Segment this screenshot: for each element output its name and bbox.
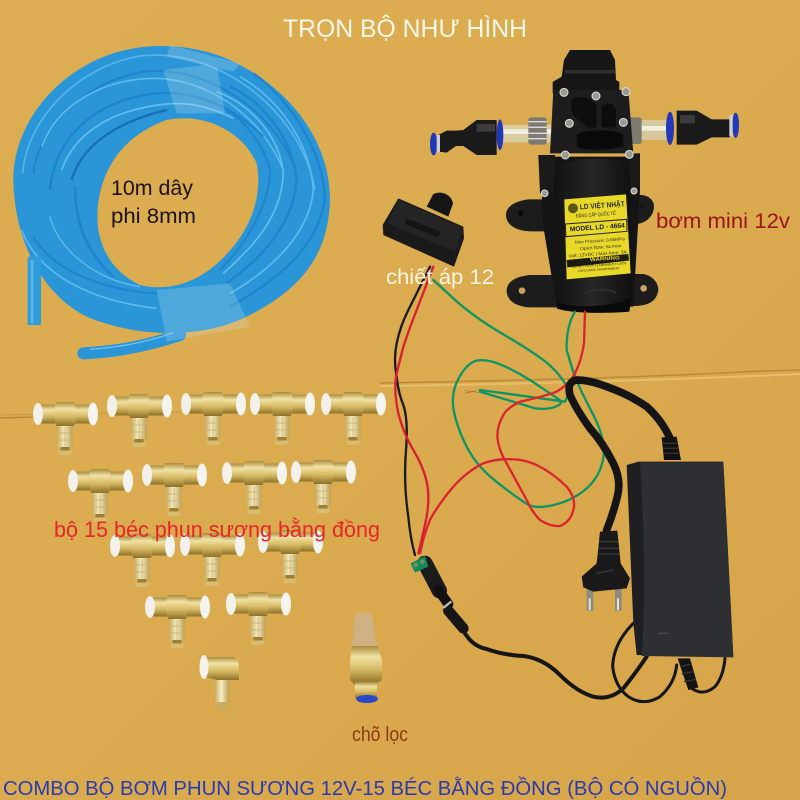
left hose connector bbox=[430, 117, 553, 155]
pump head bbox=[538, 50, 640, 197]
mains cord bbox=[569, 380, 670, 530]
bottom caption: COMBO BỘ BƠM PHUN SƯƠNG 12V-15 BÉC BẰNG ĐỒNG (BỘ CÓ NGUỒN) bbox=[3, 776, 727, 800]
inline filter bbox=[350, 612, 382, 703]
DC cords bbox=[465, 623, 725, 702]
pressure controller box bbox=[383, 193, 464, 267]
DC jack connector bbox=[411, 556, 463, 628]
yellow motor label: Max Pressure: 0.55MPa bbox=[575, 236, 626, 245]
yellow motor label: DO NOT PUMP FLAMMABLE FLUIDS bbox=[571, 261, 627, 269]
pump assembly bbox=[430, 50, 739, 313]
label: filter: chõ lọc bbox=[352, 724, 408, 746]
nozzle row 4 bbox=[145, 592, 291, 648]
brass mist nozzles (15) bbox=[33, 392, 386, 710]
yellow motor label: MODEL LD - 4664 bbox=[570, 222, 625, 233]
right hose connector bbox=[627, 111, 739, 145]
coil of blue hose bbox=[13, 45, 330, 353]
title: TRỌN BỘ NHƯ HÌNH bbox=[283, 14, 527, 43]
label: hose length: phi 8mm bbox=[111, 205, 196, 228]
yellow motor label: ĐẲNG CẤP QUỐC TẾ bbox=[576, 210, 617, 220]
yellow motor label bbox=[564, 194, 631, 279]
yellow motor label: EXPLOSIVE ENVIRONMENT bbox=[578, 266, 620, 273]
black and red wires from controller bbox=[395, 267, 433, 555]
label: hose length bbox=[111, 177, 196, 228]
label: controller: chiết áp 12 bbox=[386, 266, 494, 289]
power adapter brick bbox=[627, 437, 733, 690]
label: hose length: 10m dây bbox=[111, 177, 194, 200]
pump body bbox=[540, 157, 640, 307]
nozzle row 3 bbox=[110, 530, 323, 587]
green wires bbox=[433, 280, 604, 507]
nozzle row 2 bbox=[68, 460, 356, 522]
nozzle row 1 bbox=[33, 392, 386, 455]
label: pump: bơm mini 12v bbox=[656, 210, 791, 233]
yellow motor label: Open flow: 5L/min bbox=[580, 243, 622, 251]
mounting feet bbox=[506, 195, 658, 307]
red wire from pump bbox=[420, 312, 585, 553]
label: nozzles: bộ 15 béc phun sương bằng đồng bbox=[54, 517, 380, 542]
wall plug bbox=[582, 531, 630, 611]
elbow nozzle bbox=[200, 655, 239, 710]
wiring and power cords bbox=[395, 267, 725, 702]
yellow motor label: Volt: 12VDC | Max Amp: 3A bbox=[568, 249, 627, 258]
yellow motor label: LD VIỆT NHẬT bbox=[580, 199, 625, 211]
yellow motor label: WARNING bbox=[590, 255, 620, 263]
motor bbox=[553, 158, 632, 313]
